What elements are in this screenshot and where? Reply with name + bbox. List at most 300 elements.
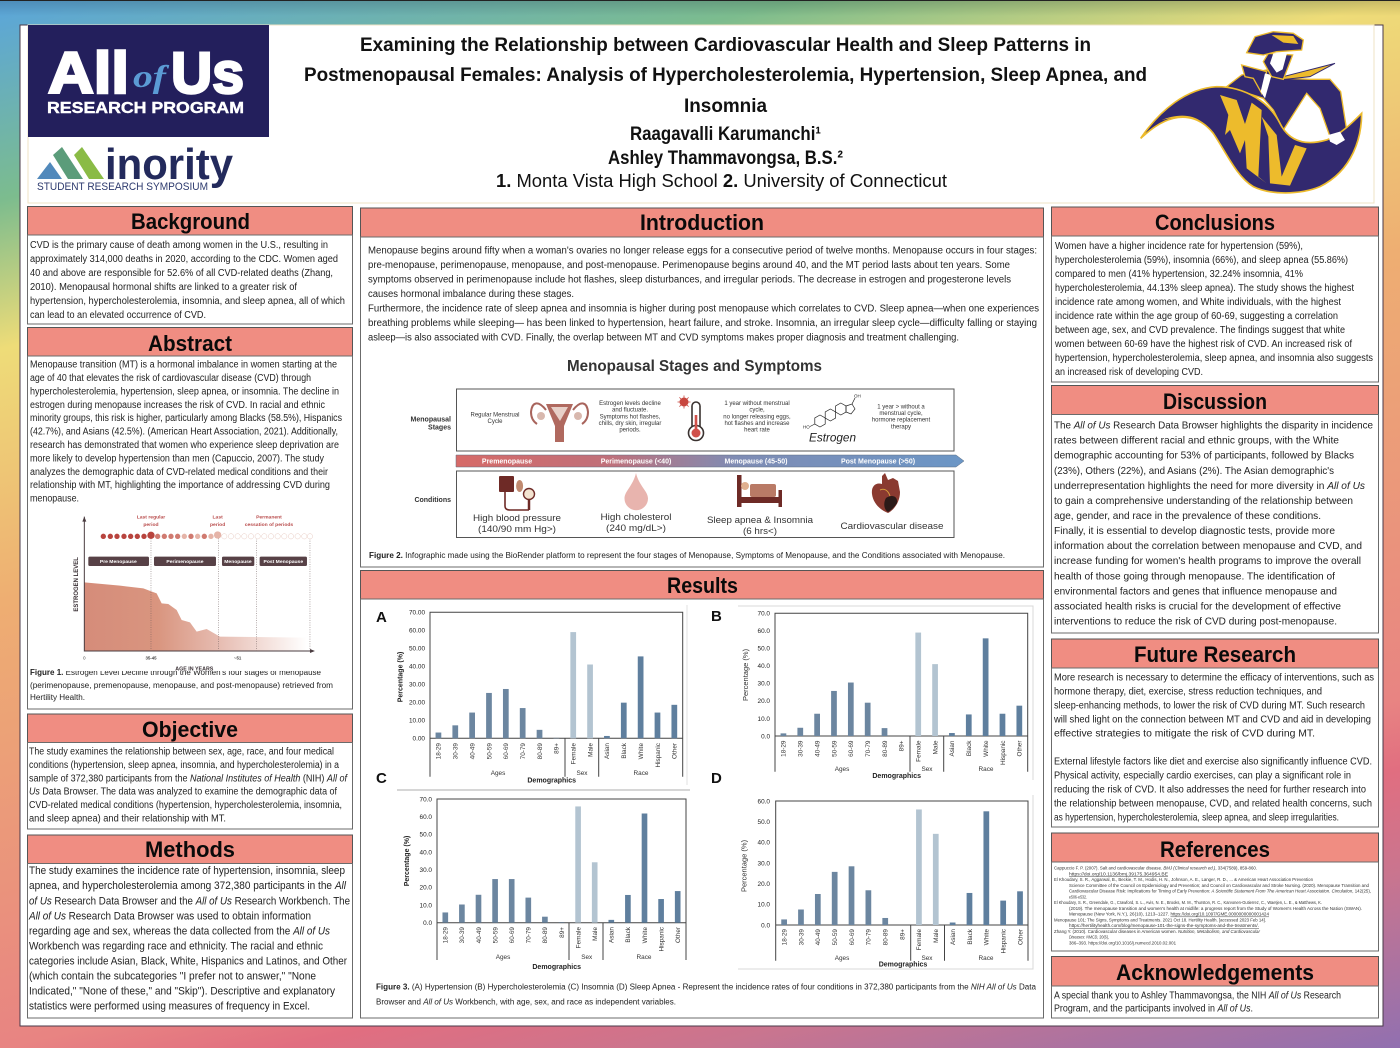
chart: C insomnia: 30.0 bbox=[420, 867, 432, 874]
chart: D sleep apnea: 30.0 bbox=[758, 860, 770, 867]
label: menopausal stages row: Stages bbox=[428, 424, 451, 432]
text: menopause symptoms: cycle, bbox=[749, 408, 765, 414]
chart: B hypercholesterolemia: Black bbox=[966, 740, 973, 756]
text: methods body: categories include Asian, Black, White, Hispanics and Latinos, and Other bbox=[29, 956, 347, 968]
chart: D sleep apnea: 50.0 bbox=[758, 819, 770, 826]
chart: B hypercholesterolemia: Ages bbox=[835, 766, 849, 773]
label: panel B: B bbox=[711, 608, 722, 625]
chart: C insomnia: Other bbox=[675, 926, 682, 943]
chart: C insomnia: 70.0 bbox=[420, 796, 432, 803]
text: regular menstrual cycle: Cycle bbox=[487, 419, 503, 425]
panel: objective bbox=[28, 714, 352, 829]
chart: A hypertension: Percentage (%) bbox=[398, 652, 404, 702]
chart: A hypertension bbox=[376, 609, 683, 784]
text: high blood pressure bbox=[473, 513, 561, 535]
icon: estrogen molecule: HO bbox=[803, 424, 810, 430]
text: discussion body: to gain a comprehensive understanding of the relationship between bbox=[1054, 496, 1353, 507]
text: methods body: statistics were performed using measures of frequency in Excel. bbox=[29, 1001, 310, 1013]
diagram: associated conditions bbox=[414, 471, 954, 538]
chart: C insomnia bbox=[376, 770, 686, 971]
text: conclusions body: women between 60-69 have the highest risk of CVD. An increased risk of bbox=[1054, 339, 1352, 350]
text: future research body: sleep-enhancing methods, to lower the risk of CVD during MT. Such research bbox=[1054, 700, 1365, 712]
chart: D sleep apnea: 70-79 bbox=[866, 929, 873, 945]
text: figure 3 caption bbox=[376, 982, 1037, 1006]
authors: Raagavalli Karumanchi¹ bbox=[630, 123, 821, 145]
logo: All of Us Research Program: of bbox=[133, 58, 170, 94]
chart: D sleep apnea: 40-49 bbox=[815, 929, 822, 945]
text: high cholesterol: High cholesterol bbox=[600, 512, 672, 523]
chart: A hypertension: 30.00 bbox=[409, 682, 425, 689]
chart: C insomnia: Hispanic bbox=[658, 926, 665, 952]
text: discussion body: rates between different racial and ethnic groups, with the White bbox=[1054, 436, 1339, 447]
chart: B hypercholesterolemia: Percentage (%) bbox=[741, 648, 750, 701]
text: perimenopause symptoms bbox=[599, 401, 662, 434]
panel: abstract bbox=[28, 328, 352, 709]
text: abstract body: more likely to develop hypertension than men (Capuccio, 2007). The study bbox=[30, 453, 324, 464]
text: abstract body: age of 40 that elevates the risk of cardiovascular disease (CVD) through bbox=[30, 373, 311, 384]
text: discussion body: information about the correlation between menopause and CVD, and bbox=[1054, 541, 1362, 552]
panel: references bbox=[1052, 833, 1378, 951]
text: introduction body: pre-menopause, perimenopause, menopause, and post-menopause. Perimenopause begins around 40, and the MT period lasts about ten years. Some bbox=[368, 260, 1010, 271]
chart: D sleep apnea: Percentage (%) bbox=[740, 839, 748, 892]
label: menopausal stages row bbox=[411, 416, 451, 432]
text: methods body: of Us Research Data Browser and the All of Us Research Workbench. The bbox=[29, 895, 350, 907]
chart: B hypercholesterolemia: Demographics bbox=[872, 773, 921, 780]
chart: A hypertension: Male bbox=[587, 743, 594, 757]
panel: acknowledgements bbox=[1052, 956, 1378, 1018]
chart: A hypertension: 20.00 bbox=[409, 700, 425, 707]
chart: C insomnia: Asian bbox=[609, 927, 616, 943]
text: background body: approximately 314,000 deaths in 2020, according to the CDC. Women aged bbox=[30, 254, 338, 265]
chart: B hypercholesterolemia: 40-49 bbox=[814, 740, 821, 757]
affiliations: 1. Monta Vista High School 2. University of Connecticut bbox=[496, 171, 947, 191]
text: perimenopause symptoms: Symptoms hot flashes, bbox=[600, 414, 661, 420]
text: abstract body: analyzes the demographic data of CVD-related medical conditions and their bbox=[30, 467, 329, 478]
chart: estrogen level decline: Perimenopause bbox=[166, 559, 204, 565]
text: figure 1 caption bbox=[30, 668, 333, 702]
text: references list: Cardiovascular Disease Risk: Implications for Timing of Early Prevention: A Scientific Statement From The American Heart Association. Circulation, 142(25), bbox=[1069, 889, 1371, 894]
text: methods body: Indicated," "None of these," and "Skip"). Descriptive and explanatory bbox=[29, 986, 336, 998]
chart: B hypercholesterolemia: 70-79 bbox=[865, 740, 872, 757]
text: methods body: regarding age and sex, whereas the data collected from the All of Us bbox=[29, 926, 331, 938]
chart: B hypercholesterolemia: White bbox=[983, 740, 990, 757]
text: references list: (2019). The menopause transition and women's health at midlife: a progress report from the Study of Women's Health Across the Nation (SWAN). bbox=[1069, 906, 1362, 911]
chart: C insomnia: 60-69 bbox=[509, 927, 516, 943]
text: regular menstrual cycle bbox=[470, 412, 520, 425]
text: background body: CVD is the primary cause of death among women in the U.S., resulting in bbox=[30, 240, 328, 251]
chart: D sleep apnea: Hispanic bbox=[1000, 928, 1008, 954]
text: references list: El Khoudary, S. R., Aggarwal, B., Beckie, T. M., Hodis, H. N., Johnson, A. E., Langer, R. D., ... & American Heart Association Prevention bbox=[1054, 877, 1313, 882]
chart: A hypertension: 80-89 bbox=[537, 743, 544, 759]
text: introduction body: symptoms observed in perimenopause include hot flashes, sleep disturbances, and irregular periods. The decrease in estrogen and progesterone levels bbox=[368, 274, 1011, 286]
chart: C insomnia: 40-49 bbox=[476, 927, 483, 943]
text: objective body: and sleep apnea) and their relationship with MT. bbox=[29, 814, 226, 825]
chart: A hypertension: Race bbox=[634, 770, 649, 777]
chart: B hypercholesterolemia: Other bbox=[1017, 740, 1024, 756]
text: menopause symptoms: 1 year without menstrual bbox=[724, 401, 790, 407]
panel: discussion bbox=[1052, 386, 1378, 633]
icon: bed bbox=[737, 475, 782, 507]
text: references list: https://hertilityhealth.com/blog/menopause-101-the-signs-the-symptoms-and-the-treatments/. bbox=[1069, 923, 1259, 928]
icon: estrogen molecule bbox=[803, 394, 861, 445]
heading: acknowledgements: Acknowledgements bbox=[1116, 960, 1314, 985]
chart: D sleep apnea: White bbox=[984, 929, 991, 945]
chart title: menopausal stages and symptoms: Menopausal Stages and Symptoms bbox=[567, 358, 822, 375]
logo: Monta Vista matador bbox=[1141, 32, 1362, 193]
chart: estrogen level decline: period bbox=[210, 522, 225, 528]
chart: D sleep apnea: 89+ bbox=[899, 929, 906, 940]
chart: B hypercholesterolemia: Male bbox=[932, 740, 939, 754]
text: post menopause symptoms: therapy bbox=[891, 424, 911, 430]
text: references list: Cappuccio F. P. (2007). Salt and cardiovascular disease. BMJ (Clinical research ed.), 334(7589), 859-860. bbox=[1054, 866, 1257, 870]
text: post menopause symptoms: 1 year > without a bbox=[877, 404, 925, 410]
chart: estrogen level decline: Menopause bbox=[224, 559, 252, 565]
chart: B hypercholesterolemia bbox=[711, 608, 1028, 780]
authors: Ashley Thammavongsa, B.S.² bbox=[608, 147, 843, 169]
text: abstract body: estrogen during menopause increases the risk of CVD. In racial and ethnic bbox=[30, 400, 325, 411]
chart: C insomnia: Sex bbox=[581, 954, 593, 961]
text: perimenopause symptoms: and fluctuate. bbox=[612, 408, 648, 414]
chart: estrogen level decline: AGE IN YEARS bbox=[175, 667, 214, 673]
chart: A hypertension: 18-29 bbox=[436, 743, 443, 759]
text: background body: 2010). Menopausal hormonal shifts are linked to a greater risk of bbox=[30, 282, 297, 293]
text: methods body: All of Us Research Data Browser was used to obtain information bbox=[28, 910, 311, 922]
chart: C insomnia: 70-79 bbox=[526, 927, 533, 943]
chart: estrogen level decline: period bbox=[143, 522, 159, 528]
text: discussion body: interventions to reduce the risk of CVD during post-menopause. bbox=[1054, 616, 1337, 628]
chart: A hypertension: 30-39 bbox=[453, 743, 460, 759]
chart: D sleep apnea: Ages bbox=[835, 955, 849, 962]
chart: A hypertension: Ages bbox=[491, 770, 505, 777]
text: objective body: CVD-related medical conditions (hypertension, hypercholesterolemia, insomnia, bbox=[29, 800, 342, 811]
arrow: menopause timeline: Premenopause bbox=[482, 458, 532, 466]
chart: B hypercholesterolemia: 60-69 bbox=[848, 740, 855, 757]
chart: C insomnia: 80-89 bbox=[542, 927, 549, 943]
text: discussion body: Finally, it is essential to develop diagnostic tests, provide more bbox=[1054, 526, 1335, 537]
text: methods body: Workbench was regarding race and ethnicity. The racial and ethnic bbox=[29, 941, 324, 953]
text: high blood pressure: High blood pressure bbox=[473, 513, 561, 524]
text: future research body: effective strategies to mitigate the risk of CVD during MT. bbox=[1054, 728, 1315, 740]
chart: C insomnia: Percentage (%) bbox=[404, 836, 411, 886]
chart: estrogen level decline: 0 bbox=[83, 655, 86, 660]
chart: D sleep apnea: Female bbox=[916, 929, 923, 950]
label: menopausal stages row: Menopausal bbox=[411, 416, 451, 424]
chart: D sleep apnea: 18-29 bbox=[781, 929, 788, 945]
chart: A hypertension: Black bbox=[621, 742, 628, 759]
text: discussion body: underrepresentation highlights the need for more diversity in All of Us bbox=[1054, 481, 1365, 492]
chart: C insomnia: 0.0 bbox=[423, 920, 432, 927]
chart: D sleep apnea: 10.0 bbox=[758, 902, 770, 909]
chart: D sleep apnea: 60-69 bbox=[849, 929, 856, 945]
icon: cholesterol drop bbox=[624, 473, 648, 510]
text: conclusions body: compared to men (41% hypertension, 32.24% insomnia, 41% bbox=[1055, 269, 1303, 280]
chart: estrogen level decline: Post Menopause bbox=[264, 559, 303, 565]
text: post menopause symptoms bbox=[872, 404, 931, 430]
icon: uterus bbox=[531, 403, 588, 442]
text: sleep apnea and insomnia: (6 hrs<) bbox=[743, 526, 777, 537]
chart: B hypercholesterolemia: 20.0 bbox=[758, 698, 770, 705]
text: abstract body: research has demonstrated that women who experience sleep deprivation are bbox=[30, 440, 339, 451]
chart: A hypertension: 70.00 bbox=[409, 610, 425, 617]
chart: C insomnia: Demographics bbox=[532, 964, 581, 971]
icon: blood pressure cuff bbox=[499, 476, 534, 510]
chart: D sleep apnea: Sex bbox=[921, 955, 933, 962]
heading: references: References bbox=[1160, 837, 1270, 862]
chart: D sleep apnea: 30-39 bbox=[798, 929, 805, 945]
text: background body bbox=[30, 240, 345, 321]
chart: B hypercholesterolemia: 50-59 bbox=[831, 740, 838, 757]
chart: B hypercholesterolemia: 18-29 bbox=[781, 740, 788, 757]
text: introduction body: causes hormonal imbalance during these stages. bbox=[368, 289, 574, 300]
text: abstract body: minority groups, this risk is higher, particularly among Blacks (58.5%), Hispanics bbox=[30, 413, 342, 424]
chart: C insomnia: 30-39 bbox=[459, 927, 466, 943]
chart: estrogen level decline: Last bbox=[213, 515, 223, 521]
text: future research body: as hypertension, hypercholesterolemia, sleep apnea, and sleep irregularities. bbox=[1054, 812, 1339, 824]
icon: estrogen molecule: OH bbox=[854, 394, 861, 398]
chart: A hypertension: Asian bbox=[604, 743, 611, 759]
logo: All of Us Research Program: All bbox=[48, 41, 129, 106]
chart: estrogen level decline: ~51 bbox=[234, 655, 242, 660]
chart: B hypercholesterolemia: 10.0 bbox=[758, 716, 770, 723]
chart: B hypercholesterolemia: 50.0 bbox=[758, 646, 770, 653]
chart: estrogen level decline: ESTROGEN LEVEL bbox=[74, 557, 80, 612]
heading: introduction: Introduction bbox=[640, 210, 764, 235]
chart: A hypertension: 70-79 bbox=[520, 743, 527, 759]
text: references list bbox=[1054, 866, 1371, 946]
text: sleep apnea and insomnia: Sleep apnea & Insomnia bbox=[707, 515, 814, 526]
text: conclusions body bbox=[1054, 241, 1373, 378]
chart: A hypertension: 40.00 bbox=[409, 664, 425, 671]
chart: C insomnia: Female bbox=[575, 927, 582, 948]
text: objective body: Us Data Browser. The data was analyzed to examine the demographic data of bbox=[29, 787, 337, 798]
text: figure 2 caption: Figure 2. Infographic made using the BioRender platform to represent the four stages of Menopause, Symptoms of Menopause, and the Conditions associated with Menopause. bbox=[369, 551, 1005, 560]
chart: A hypertension: Sex bbox=[576, 770, 588, 777]
label: panel C: C bbox=[376, 770, 387, 787]
chart: B hypercholesterolemia: 70.0 bbox=[758, 611, 770, 618]
text: conclusions body: Women have a higher incidence rate for hypertension (59%), bbox=[1055, 241, 1303, 252]
text: references list: Zhang Y. (2010). Cardiovascular diseases in American women. Nutrition, Metabolism, and Cardiovascular bbox=[1054, 929, 1260, 934]
chart: A hypertension: Demographics bbox=[527, 778, 576, 784]
text: objective body: conditions (hypertension, sleep apnea, insomnia, and hypercholesterolemia) in a bbox=[29, 760, 339, 771]
text: introduction body: Menopause begins around fifty when a woman's ovaries no longer release eggs for a consecutive period of twelve months. Menopause occurs in four stages: bbox=[368, 246, 1037, 256]
text: acknowledgements body: Program, and the participants involved in All of Us. bbox=[1054, 1004, 1253, 1014]
text: discussion body: age, gender, and race in the prevalence of these conditions. bbox=[1054, 511, 1321, 522]
text: perimenopause symptoms: Estrogen levels decline bbox=[599, 401, 662, 407]
chart: D sleep apnea: Black bbox=[967, 928, 974, 945]
diagram: menopausal stages bbox=[411, 389, 954, 451]
text: figure 1 caption: Figure 1. Estrogen Level Decline through the Women's four stages of menopause bbox=[30, 668, 322, 677]
panel: conclusions bbox=[1052, 207, 1378, 382]
text: menopause symptoms: heart rate bbox=[744, 428, 771, 434]
chart: D sleep apnea: 80-89 bbox=[882, 929, 890, 945]
text: future research body: reducing the risk of CVD. It also addresses the need for further research into bbox=[1054, 784, 1366, 796]
chart: D sleep apnea: 40.0 bbox=[758, 840, 770, 847]
chart: B hypercholesterolemia: Female bbox=[916, 740, 922, 762]
chart: A hypertension: 0.00 bbox=[413, 736, 425, 743]
logo: Minority Student Research Symposium: inority bbox=[105, 140, 234, 189]
text: abstract body: hypercholesterolemia, hypertension, sleep apnea, or insomnia. The decline in bbox=[30, 386, 339, 397]
chart: B hypercholesterolemia: 0.0 bbox=[761, 733, 770, 740]
chart: A hypertension: 60-69 bbox=[503, 743, 510, 759]
chart: estrogen level decline bbox=[65, 515, 328, 673]
text: perimenopause symptoms: chills, dry skin, irregular bbox=[599, 421, 661, 427]
chart: A hypertension: 50.00 bbox=[409, 646, 425, 653]
chart: D sleep apnea: Male bbox=[933, 929, 940, 943]
label: panel D: D bbox=[711, 770, 722, 787]
text: future research body: External lifestyle factors like diet and exercise also significantly influence CVD. bbox=[1054, 756, 1372, 768]
text: abstract body: Menopause transition (MT) is a hormonal imbalance in women starting at the bbox=[30, 360, 337, 370]
chart: A hypertension: White bbox=[638, 743, 645, 759]
heading: abstract: Abstract bbox=[148, 331, 233, 356]
chart: B hypercholesterolemia: Sex bbox=[921, 766, 933, 773]
text: background body: 40 and above are responsible for 52.6% of all CVD-related deaths (Zhang, bbox=[30, 268, 333, 279]
title bbox=[304, 34, 1147, 117]
chart: D sleep apnea: Other bbox=[1017, 928, 1024, 945]
chart: B hypercholesterolemia: 80-89 bbox=[882, 740, 889, 757]
text: references list: El Khoudary, S. R., Greendale, G., Crawford, S. L., Avis, N. E., Brooks, M. M., Thurston, R. C., Karvonen-Gutierrez, C., Waetjen, L. E., & Matthews, K. bbox=[1054, 900, 1322, 905]
text: references list: 386–393. https://doi.org/10.1016/j.numecd.2010.02.001 bbox=[1069, 940, 1176, 946]
text: discussion body bbox=[1054, 420, 1373, 628]
text: perimenopause symptoms: periods. bbox=[619, 428, 641, 434]
heading: background: Background bbox=[131, 209, 250, 234]
text: references list: https://doi.org/10.1136/bmj.39175.364954.BE bbox=[1069, 871, 1168, 876]
text: high cholesterol bbox=[600, 512, 672, 534]
text: conclusions body: between age, sex, and CVD prevalence. The findings suggest that white bbox=[1055, 325, 1345, 336]
text: introduction body: breathing problems while sleeping— has been linked to hypertension, heart failure, and stroke. Insomnia, an irregular sleep cycle—difficulty falling or staying bbox=[368, 318, 1037, 329]
arrow: menopause timeline: Menopause (45-50) bbox=[724, 458, 788, 466]
text: high blood pressure: (140/90 mm Hg>) bbox=[478, 524, 556, 535]
text: conclusions body: hypercholesterolemia, 44.13% sleep apnea). The study shows the highest bbox=[1055, 283, 1354, 294]
text: acknowledgements body: A special thank you to Ashley Thammavongsa, the NIH All of Us Research bbox=[1054, 990, 1341, 1002]
text: post menopause symptoms: hormone replacement bbox=[872, 418, 931, 424]
text: objective body bbox=[29, 746, 348, 825]
chart: C insomnia: Male bbox=[592, 927, 599, 941]
chart: D sleep apnea: 0.0 bbox=[761, 922, 770, 929]
text: discussion body: associated health risks is crucial for the development of effective bbox=[1054, 602, 1341, 612]
chart: D sleep apnea bbox=[711, 770, 1028, 968]
chart: B hypercholesterolemia: 30-39 bbox=[798, 740, 805, 757]
text: menopause symptoms bbox=[723, 401, 791, 434]
logo: Minority Student Research Symposium bbox=[37, 140, 234, 193]
text: objective body: sample of 372,380 participants from the National Institutes of Health (NIH) All of bbox=[29, 773, 348, 784]
heading: future research: Future Research bbox=[1134, 642, 1296, 667]
text: conclusions body: hypercholesterolemia (59%), insomnia (66%), and sleep apnea (55.86%) bbox=[1055, 255, 1348, 266]
text: conclusions body: incidence rate within the age group of 60-69, suggesting a correlation bbox=[1055, 311, 1338, 322]
chart: estrogen level decline: cessation of periods bbox=[245, 522, 293, 528]
text: regular menstrual cycle: Regular Menstrual bbox=[470, 412, 520, 418]
text: figure 3 caption: Figure 3. (A) Hypertension (B) Hypercholesterolemia (C) Insomnia (D) Sleep Apnea - Represent the incidence rates of four conditions in 372,380 participants from the NIH All of Us Data bbox=[376, 982, 1037, 992]
chart: B hypercholesterolemia: Race bbox=[979, 766, 994, 773]
text: future research body bbox=[1053, 672, 1374, 824]
chart: A hypertension: Female bbox=[570, 743, 578, 764]
text: sleep apnea and insomnia bbox=[707, 515, 814, 537]
panel: introduction bbox=[360, 208, 1044, 567]
text: future research body: More research is necessary to determine the efficacy of interventions, such as bbox=[1054, 672, 1374, 684]
chart: A hypertension: 10.00 bbox=[409, 718, 425, 725]
text: menopause symptoms: hot flashes and increase bbox=[724, 421, 790, 427]
text: introduction body: Furthermore, the incidence rate of sleep apnea and insomnia is higher during post menopause which correlates to CVD. Sleep apnea—when one experiences bbox=[368, 304, 1039, 314]
text: post menopause symptoms: menstrual cycle, bbox=[879, 411, 923, 417]
logo: All of Us Research Program bbox=[28, 25, 269, 137]
chart: C insomnia: 20.0 bbox=[420, 885, 432, 892]
chart: B hypercholesterolemia: 40.0 bbox=[758, 663, 770, 670]
text: abstract body: menopause. bbox=[30, 494, 79, 505]
heading: objective: Objective bbox=[142, 717, 238, 742]
chart: C insomnia: 10.0 bbox=[420, 902, 432, 909]
text: discussion body: environmental factors and genes that influence menopause and bbox=[1054, 586, 1337, 597]
text: acknowledgements body bbox=[1054, 990, 1341, 1014]
chart: C insomnia: White bbox=[642, 927, 649, 943]
text: references list: e506-e532. bbox=[1069, 894, 1087, 899]
logo: All of Us Research Program: Us bbox=[171, 41, 244, 106]
label: panel A: A bbox=[376, 609, 387, 626]
text: discussion body: (23%), Others (22%), and Asians (2%). The Asian demographic's bbox=[1054, 466, 1334, 477]
text: references list: Menopause (New York, N.Y.), 26(10), 1213–1227. https://doi.org/10.1097/GME.0000000000001424 bbox=[1069, 912, 1270, 917]
text: future research body: will shed light on the connection between MT and CVD and aid in developing bbox=[1053, 714, 1371, 726]
chart: B hypercholesterolemia: Hispanic bbox=[1000, 740, 1007, 765]
text: future research body: the relationship between menopause, CVD, and related health concerns, such bbox=[1054, 798, 1372, 810]
chart: C insomnia: 40.0 bbox=[420, 849, 432, 856]
chart: C insomnia: 50.0 bbox=[420, 832, 432, 839]
text: methods body: (which contain the subcategories "I prefer not to answer," "None bbox=[29, 971, 316, 983]
chart: A hypertension: 60.00 bbox=[409, 628, 425, 635]
text: abstract body: (42.7%), and Asians (42.5%). (American Heart Association, 2021). Additionally, bbox=[30, 427, 338, 438]
icon: estrogen molecule: Estrogen bbox=[809, 431, 856, 445]
chart: A hypertension: Hispanic bbox=[655, 742, 662, 768]
text: references list: Science Committee of the Council on Epidemiology and Prevention; and Council on Cardiovascular and Stroke Nursing. (2020). Menopause Transition and bbox=[1069, 883, 1369, 888]
logo: All of Us Research Program: RESEARCH PROGRAM bbox=[47, 100, 244, 117]
text: future research body: hormone therapy, diet, exercise, stress reduction techniques, and bbox=[1054, 686, 1322, 698]
text: figure 1 caption: Hertility Health. bbox=[30, 693, 85, 702]
chart: D sleep apnea: 60.0 bbox=[758, 798, 770, 805]
label: conditions row: Conditions bbox=[414, 497, 451, 504]
chart: A hypertension: 40-49 bbox=[469, 743, 476, 759]
text: menopause symptoms: no longer releasing eggs, bbox=[723, 414, 791, 420]
text: methods body bbox=[28, 865, 350, 1013]
text: background body: can lead to an elevated occurrence of CVD. bbox=[30, 310, 206, 321]
chart: estrogen level decline: Permanent bbox=[256, 515, 282, 521]
text: references list: Menopause 101: The Signs, Symptoms and Treatments. 2021 Oct 18. Hertility Health. [accessed 2023 Feb 14]. bbox=[1054, 917, 1266, 922]
panel: results bbox=[360, 570, 1044, 1018]
chart: A hypertension: 50-59 bbox=[486, 743, 493, 759]
chart: C insomnia: Race bbox=[637, 954, 652, 961]
chart: estrogen level decline: Pre Menopause bbox=[100, 559, 137, 565]
chart: B hypercholesterolemia: 89+ bbox=[899, 740, 906, 751]
arrow: menopause timeline bbox=[456, 455, 964, 467]
text: future research body: Physical activity, especially cardio exercises, can play a significant role in bbox=[1054, 770, 1351, 782]
title: Postmenopausal Females: Analysis of Hypercholesterolemia, Hypertension, Sleep Apnea, and bbox=[304, 64, 1147, 86]
heading: conclusions: Conclusions bbox=[1155, 210, 1275, 235]
text: abstract body: relationship with MT, highlighting the importance of addressing CVD during bbox=[30, 480, 330, 491]
chart: C insomnia: Ages bbox=[496, 954, 510, 961]
title: Examining the Relationship between Cardiovascular Health and Sleep Patterns in bbox=[360, 34, 1091, 56]
text: references list: Diseases: NMCD, 20(6), bbox=[1069, 935, 1109, 940]
heading: results: Results bbox=[667, 573, 738, 598]
logo: Minority Student Research Symposium: STUDENT RESEARCH SYMPOSIUM bbox=[37, 181, 208, 193]
text: introduction body: asleep—is also associated with CVD. Finally, the overlap between MT and CVD symptoms makes proper diagnosis and treatment challenging. bbox=[368, 332, 959, 344]
text: conclusions body: an increased risk of developing CVD. bbox=[1055, 367, 1203, 378]
arrow: menopause timeline: Post Menopause (>50) bbox=[841, 458, 915, 466]
chart: D sleep apnea: Demographics bbox=[879, 962, 927, 968]
text: background body: hypertension, hypercholesterolemia, insomnia, and sleep apnea, all of which bbox=[30, 296, 345, 307]
text: figure 3 caption: Browser and All of Us Workbench, with age, sex, and race as independent variables. bbox=[376, 998, 676, 1006]
chart: A hypertension: Other bbox=[672, 742, 679, 759]
chart: B hypercholesterolemia: 60.0 bbox=[758, 628, 770, 635]
icon: heart bbox=[872, 473, 900, 513]
chart: C insomnia: 18-29 bbox=[443, 927, 450, 943]
chart: D sleep apnea: Asian bbox=[950, 929, 957, 945]
chart: estrogen level decline: 35-45 bbox=[145, 655, 157, 660]
